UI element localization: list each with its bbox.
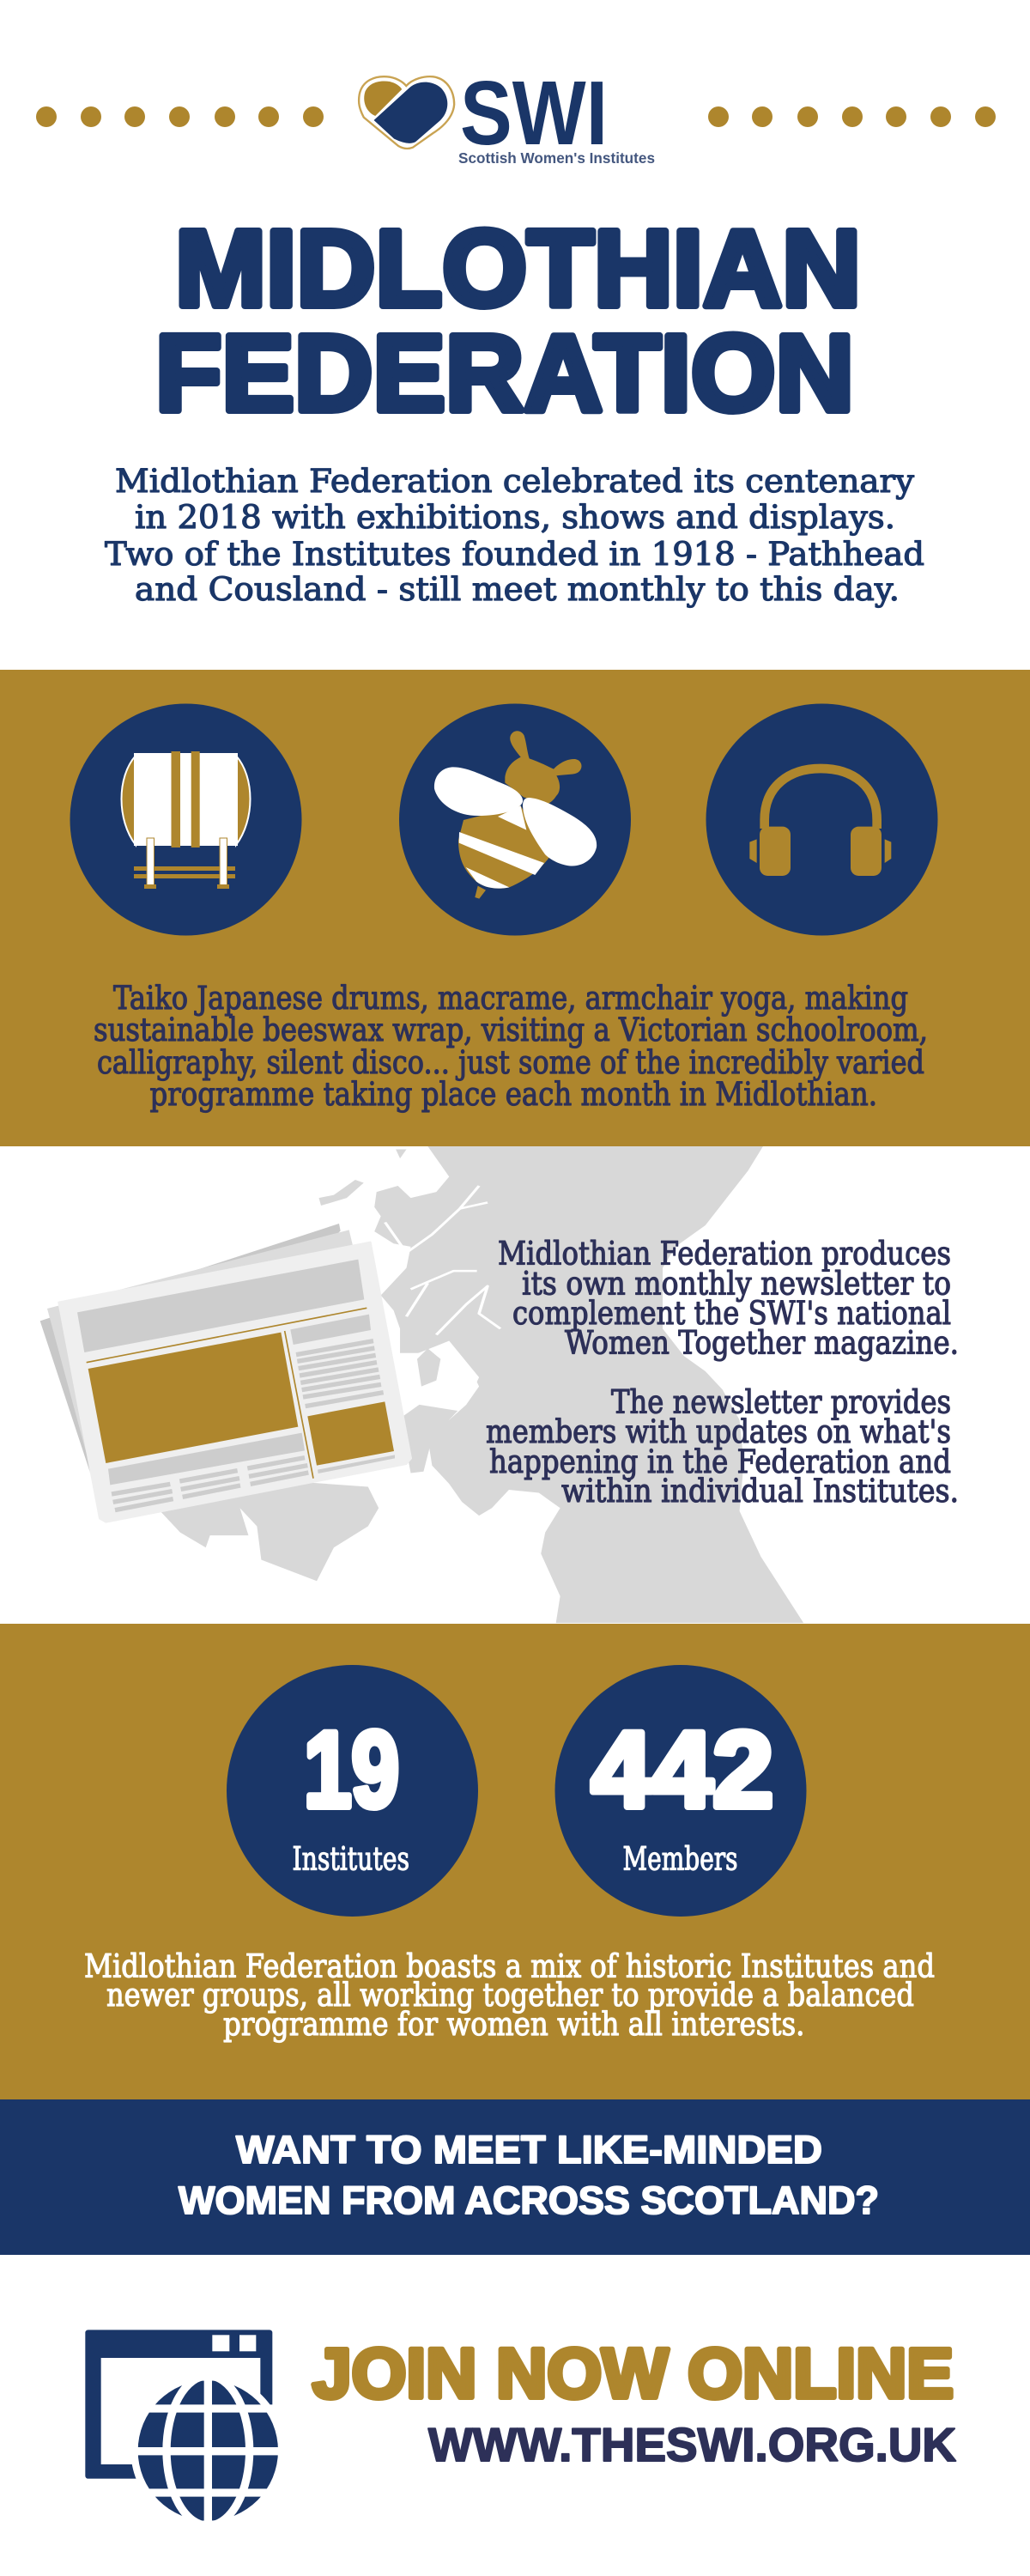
statistics text <box>84 1947 935 2043</box>
icon: bee <box>399 704 631 936</box>
stat: 19 institutes: Institutes <box>292 1841 409 1877</box>
programme text: programme taking place each month in Midlothian. <box>149 1076 877 1113</box>
newsletter text: its own monthly newsletter to <box>522 1266 951 1302</box>
stat: 19 institutes: 19 <box>304 1710 399 1830</box>
panel: newsletter <box>40 1146 959 1623</box>
title: MIDLOTHIAN <box>175 208 861 329</box>
panel: statistics <box>0 1624 1030 2099</box>
statistics text: newer groups, all working together to provide a balanced <box>106 1977 914 2014</box>
newsletter text: The newsletter provides <box>611 1384 951 1420</box>
newsletter text: Midlothian Federation produces <box>498 1235 951 1273</box>
panel: call to action banner <box>0 2099 1030 2255</box>
icon: browser window and globe <box>85 2330 285 2528</box>
dotted line: left <box>36 106 324 127</box>
newsletter text: happening in the Federation and <box>489 1443 951 1480</box>
programme text: sustainable beeswax wrap, visiting a Victorian schoolroom, <box>94 1012 928 1048</box>
SWI logo <box>359 63 655 167</box>
intro text: and Cousland - still meet monthly to this day. <box>135 571 900 608</box>
banner heading <box>179 2128 879 2222</box>
newsletter text: complement the SWI's national <box>512 1295 951 1332</box>
banner heading: WANT TO MEET LIKE-MINDED <box>236 2128 822 2172</box>
logo strapline: Scottish Women's Institutes <box>458 149 655 167</box>
programme text: Taiko Japanese drums, macrame, armchair yoga, making <box>113 980 908 1017</box>
logo wordmark: SWI <box>460 63 608 164</box>
website address: WWW.THESWI.ORG.UK <box>428 2418 956 2471</box>
programme text <box>94 980 928 1113</box>
title <box>155 208 861 434</box>
programme text: calligraphy, silent disco... just some of the incredibly varied <box>97 1044 924 1081</box>
stat: 442 members: 442 <box>591 1710 773 1830</box>
newsletter text: members with updates on what's <box>486 1413 951 1450</box>
map of Scotland <box>154 1146 803 1623</box>
stat: 442 members <box>554 1665 807 1917</box>
icon: headphones <box>706 704 937 936</box>
newsletter text: Women Together magazine. <box>565 1324 959 1362</box>
intro text: Two of the Institutes founded in 1918 - Pathhead <box>105 536 924 573</box>
intro text: in 2018 with exhibitions, shows and displays. <box>135 499 895 536</box>
dotted line: right <box>708 106 996 127</box>
banner heading: WOMEN FROM ACROSS SCOTLAND? <box>179 2178 879 2222</box>
stat: 19 institutes <box>227 1665 478 1917</box>
join now heading: JOIN NOW ONLINE <box>312 2335 954 2413</box>
intro text <box>105 463 924 608</box>
panel: programme <box>0 670 1030 1146</box>
title: FEDERATION <box>155 313 854 434</box>
icon: taiko drum <box>70 704 302 936</box>
intro text: Midlothian Federation celebrated its centenary <box>115 463 914 500</box>
newsletter text <box>486 1235 959 1510</box>
icon: newspaper <box>40 1224 411 1522</box>
icon: heart <box>359 76 454 149</box>
statistics text: programme for women with all interests. <box>223 2006 805 2043</box>
newsletter text: within individual Institutes. <box>561 1473 959 1510</box>
stat: 442 members: Members <box>623 1841 738 1877</box>
